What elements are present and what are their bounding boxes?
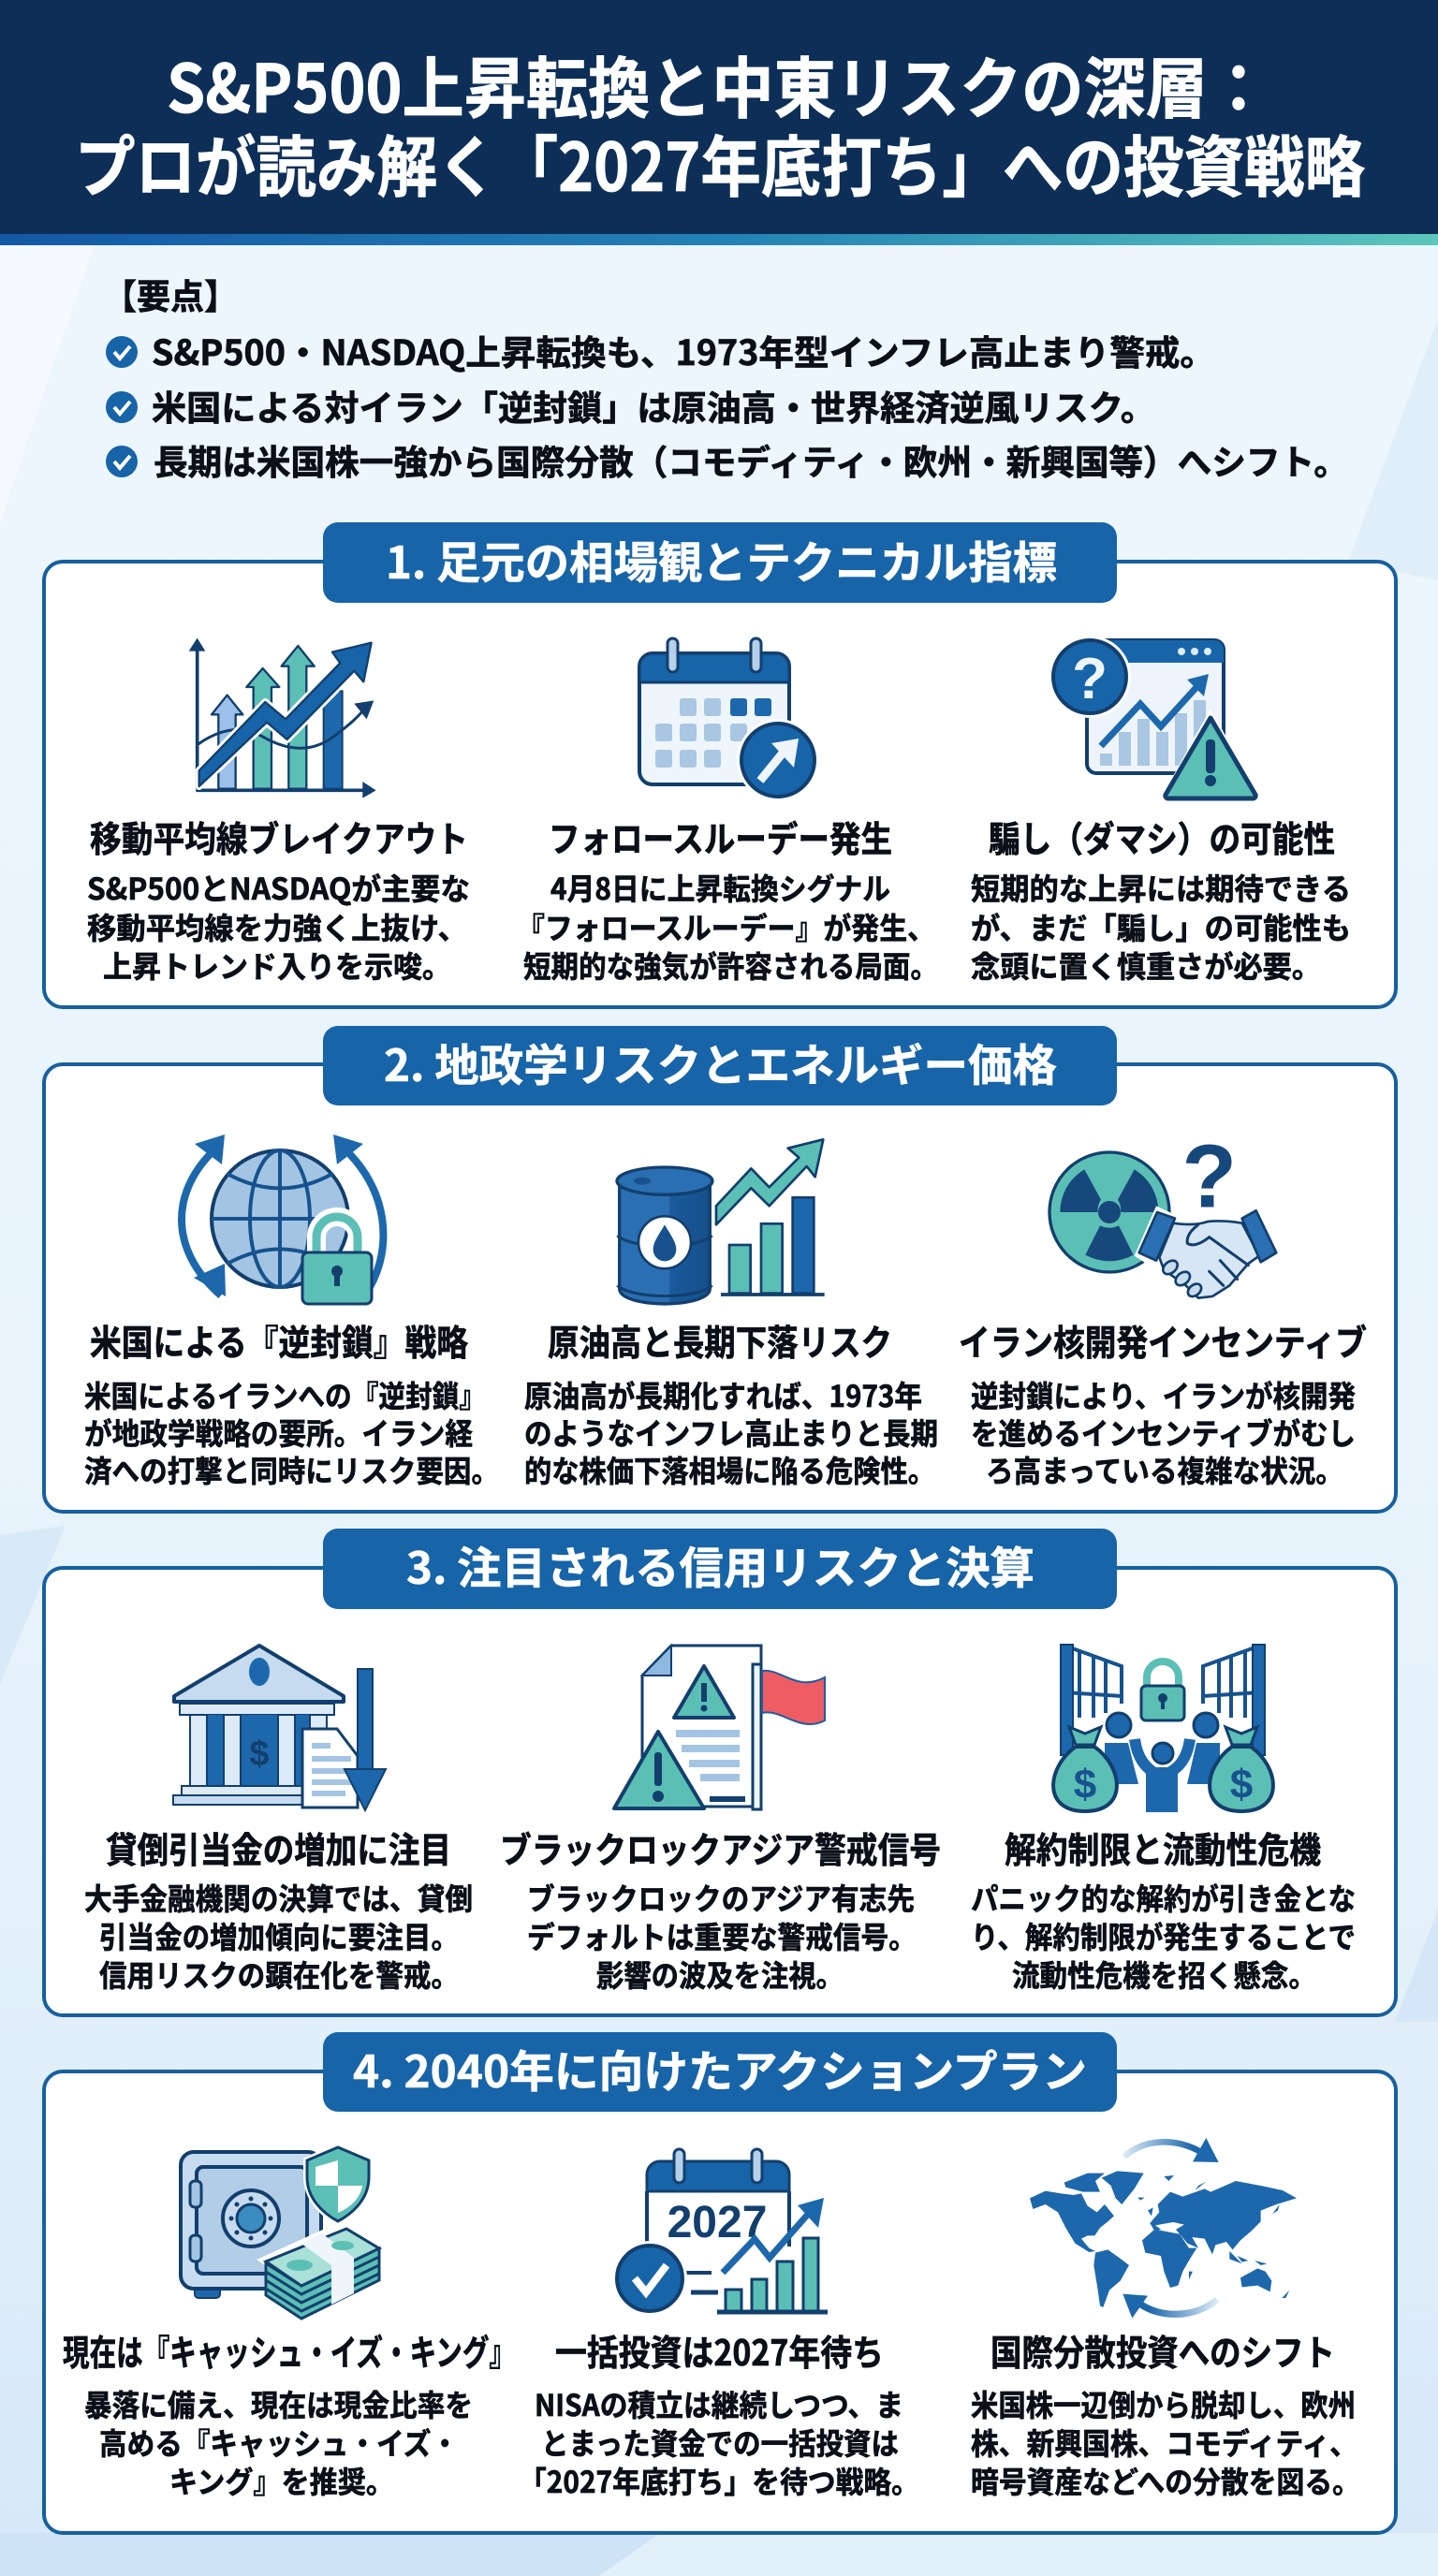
section heading 1: 1. 足元の相場観とテクニカル指標 xyxy=(386,527,1057,592)
icon: radiation and handshake: ? xyxy=(1181,1126,1237,1226)
text: cash is king: 現在は『キャッシュ・イズ・キング』 xyxy=(63,2324,516,2376)
text: cash is king: 高める『キャッシュ・イズ・ xyxy=(99,2421,459,2464)
key point 1: S&P500・NASDAQ上昇転換も、1973年型インフレ高止まり警戒。 xyxy=(152,325,1215,375)
text: BlackRock Asia warning: ブラックロックのアジア有志先 xyxy=(527,1876,915,1919)
icon: gates, lock, money bags: $ xyxy=(1230,1762,1253,1808)
header banner xyxy=(0,0,1438,245)
text: oil price and long decline risk xyxy=(524,1314,938,1491)
text: oil price and long decline risk: 的な株価下落相場に陥る危険性。 xyxy=(524,1448,935,1491)
text: lump sum wait until 2027: 一括投資は2027年待ち xyxy=(555,2324,884,2376)
icon: fake-out warning: ? xyxy=(1072,647,1108,711)
text: shift to global diversification: 暗号資産などへの分散を図る。 xyxy=(971,2459,1360,2502)
text: moving average breakout: 上昇トレンド入りを示唆。 xyxy=(103,944,451,987)
text: possible fake-out: 念頭に置く慎重さが必要。 xyxy=(971,944,1321,987)
icon: calendar with up arrow xyxy=(639,638,819,801)
section heading 2: 2. 地政学リスクとエネルギー価格 xyxy=(384,1030,1057,1094)
key points xyxy=(103,269,1348,485)
icon: breakout chart xyxy=(189,638,376,798)
text: BlackRock Asia warning: 影響の波及を注視。 xyxy=(596,1953,844,1996)
icon: 2027 calendar, check and rising chart xyxy=(612,2149,828,2316)
text: redemption limits and liquidity crisis xyxy=(971,1822,1356,1996)
text: possible fake-out xyxy=(971,811,1351,987)
text: loan loss provisions: 大手金融機関の決算では、貸倒 xyxy=(84,1876,473,1919)
text: loan loss provisions: 引当金の増加傾向に要注目。 xyxy=(99,1914,459,1957)
text: follow-through day: 『フォロースルーデー』が発生、 xyxy=(517,905,935,948)
text: moving average breakout: S&P500とNASDAQが主要な xyxy=(87,866,470,909)
text: counter-blockade strategy: 米国による『逆封鎖』戦略 xyxy=(90,1314,468,1366)
text: Iran nuclear incentive xyxy=(959,1314,1367,1491)
text: shift to global diversification: 株、新興国株、コモディティ、 xyxy=(971,2421,1357,2464)
text: BlackRock Asia warning: デフォルトは重要な警戒信号。 xyxy=(527,1914,917,1957)
text: follow-through day: 4月8日に上昇転換シグナル xyxy=(550,866,890,909)
text: Iran nuclear incentive: を進めるインセンティブがむし xyxy=(971,1411,1356,1454)
text: follow-through day: 短期的な強気が許容される局面。 xyxy=(523,944,938,987)
text: counter-blockade strategy: 米国によるイランへの『逆封鎖』 xyxy=(84,1373,486,1416)
section heading 3 xyxy=(323,1529,1117,1609)
text: follow-through day: フォロースルーデー発生 xyxy=(549,811,892,862)
icon: gates, lock, money bags xyxy=(1053,1645,1273,1811)
text: shift to global diversification xyxy=(971,2324,1360,2502)
icon: bank with falling arrow: $ xyxy=(249,1734,270,1774)
icon: bank with falling arrow xyxy=(173,1646,386,1810)
section heading 3: 3. 注目される信用リスクと決算 xyxy=(406,1532,1034,1597)
key point 3: 長期は米国株一強から国際分散（コモディティ・欧州・新興国等）へシフト。 xyxy=(154,434,1348,485)
text: oil price and long decline risk: のようなインフレ高止まりと長期 xyxy=(524,1411,938,1454)
text: counter-blockade strategy: が地政学戦略の要所。イラン経 xyxy=(84,1411,473,1454)
text: redemption limits and liquidity crisis: 解約制限と流動性危機 xyxy=(1005,1822,1321,1873)
text: moving average breakout: 移動平均線を力強く上抜け、 xyxy=(87,905,467,948)
panel: 3 credit risk and earnings xyxy=(44,1529,1396,2015)
text: follow-through day xyxy=(517,811,938,987)
text: moving average breakout xyxy=(87,811,470,987)
text: moving average breakout: 移動平均線ブレイクアウト xyxy=(90,811,468,862)
icon: safe, shield and cash xyxy=(181,2142,384,2319)
text: shift to global diversification: 米国株一辺倒から脱却し、欧州 xyxy=(971,2382,1356,2425)
text: oil price and long decline risk: 原油高が長期化すれば、1973年 xyxy=(524,1373,922,1416)
text: BlackRock Asia warning: ブラックロックアジア警戒信号 xyxy=(500,1822,941,1873)
text: counter-blockade strategy: 済への打撃と同時にリスク要因。 xyxy=(84,1448,499,1491)
icon: document with warnings and red flag xyxy=(614,1646,825,1809)
text: redemption limits and liquidity crisis: り、解約制限が発生することで xyxy=(971,1914,1356,1957)
section heading 2 xyxy=(323,1026,1117,1105)
icon: fake-out warning xyxy=(1049,636,1263,803)
panel: 4 action plan toward 2040 xyxy=(44,2032,1396,2533)
title xyxy=(75,37,1365,211)
text: possible fake-out: が、まだ「騙し」の可能性も xyxy=(971,905,1351,948)
key points heading: 【要点】 xyxy=(103,269,238,319)
icon: radiation and handshake xyxy=(1049,1126,1283,1303)
text: Iran nuclear incentive: 逆封鎖により、イランが核開発 xyxy=(971,1373,1356,1416)
text: lump sum wait until 2027: 「2027年底打ち」を待つ戦略。 xyxy=(519,2459,919,2502)
icon: 2027 calendar, check and rising chart: 2027 xyxy=(668,2198,767,2247)
text: loan loss provisions xyxy=(84,1822,473,1996)
panel: 1 market view and technicals xyxy=(44,522,1396,1007)
text: cash is king: キング』を推奨。 xyxy=(169,2459,394,2502)
icon: locked globe with arrows xyxy=(182,1134,383,1304)
text: Iran nuclear incentive: イラン核開発インセンティブ xyxy=(959,1314,1367,1366)
text: lump sum wait until 2027 xyxy=(519,2324,919,2502)
text: loan loss provisions: 信用リスクの顕在化を警戒。 xyxy=(99,1953,459,1996)
text: counter-blockade strategy xyxy=(84,1314,499,1491)
icon: world map with rotating arrows xyxy=(1030,2138,1297,2319)
text: lump sum wait until 2027: NISAの積立は継続しつつ、ま xyxy=(535,2382,903,2425)
icon: gates, lock, money bags: $ xyxy=(1074,1762,1096,1808)
section heading 1 xyxy=(323,522,1117,603)
text: loan loss provisions: 貸倒引当金の増加に注目 xyxy=(106,1822,451,1873)
text: cash is king xyxy=(63,2324,516,2502)
text: cash is king: 暴落に備え、現在は現金比率を xyxy=(84,2382,473,2425)
text: shift to global diversification: 国際分散投資へのシフト xyxy=(990,2324,1335,2376)
text: Iran nuclear incentive: ろ高まっている複雑な状況。 xyxy=(986,1448,1343,1491)
panel: 2 geopolitical risk and energy xyxy=(44,1026,1396,1512)
icon: oil barrel and rising chart xyxy=(617,1139,825,1304)
text: lump sum wait until 2027: とまった資金での一括投資は xyxy=(541,2421,899,2464)
text: redemption limits and liquidity crisis: 流動性危機を招く懸念。 xyxy=(1012,1953,1316,1996)
text: possible fake-out: 騙し（ダマシ）の可能性 xyxy=(989,811,1335,862)
text: redemption limits and liquidity crisis: パニック的な解約が引き金とな xyxy=(971,1876,1356,1919)
title: S&P500上昇転換と中東リスクの深層： xyxy=(167,37,1269,132)
section heading 4: 4. 2040年に向けたアクションプラン xyxy=(353,2036,1087,2100)
text: BlackRock Asia warning xyxy=(500,1822,941,1996)
text: oil price and long decline risk: 原油高と長期下落リスク xyxy=(548,1314,892,1366)
key point 2: 米国による対イラン「逆封鎖」は原油高・世界経済逆風リスク。 xyxy=(152,380,1155,431)
text: possible fake-out: 短期的な上昇には期待できる xyxy=(971,866,1351,909)
